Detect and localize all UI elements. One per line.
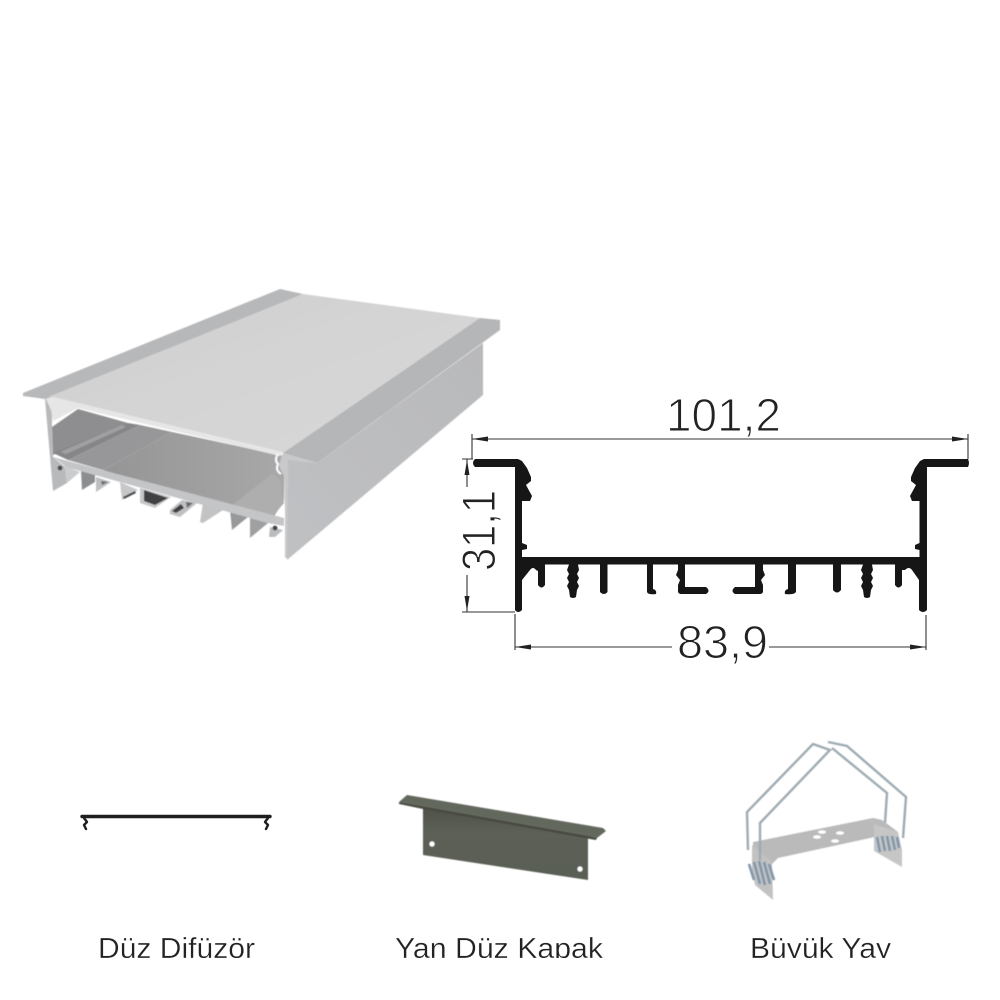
spring plate xyxy=(753,818,898,866)
accessory: flat diffuser xyxy=(82,816,270,829)
section profile xyxy=(473,459,969,612)
back wire xyxy=(832,748,887,823)
left leg xyxy=(752,845,773,900)
left flange xyxy=(23,289,303,399)
dimension 83,9 xyxy=(515,614,926,668)
dimension 101,2: 101,2 xyxy=(666,389,781,441)
accessory: end cap xyxy=(399,795,606,880)
dimension 101,2 xyxy=(472,389,968,459)
cross-section technical drawing xyxy=(452,389,969,668)
accessory: large spring xyxy=(747,742,906,900)
right side wall xyxy=(287,343,483,560)
right leg xyxy=(874,824,902,867)
back wall interior xyxy=(52,409,128,455)
label: Yan Düz Kapak: Yan Düz Kapak xyxy=(395,933,604,965)
dimension 31,1: 31,1 xyxy=(452,490,505,571)
left wall front face xyxy=(45,399,67,491)
clip band below labels xyxy=(0,958,1000,1000)
interior floor bands xyxy=(53,423,140,460)
right flange xyxy=(283,318,500,463)
base front strip xyxy=(53,457,284,526)
diffuser cover xyxy=(48,294,480,453)
label: Düz Difüzör: Düz Difüzör xyxy=(98,933,255,965)
front fins xyxy=(58,466,283,538)
dimension 31,1 xyxy=(452,459,515,612)
right end face xyxy=(279,453,317,558)
coil springs xyxy=(749,836,899,885)
3D aluminium profile illustration xyxy=(23,289,500,560)
front wires xyxy=(747,744,830,860)
label: Büyük Yay: Büyük Yay xyxy=(750,933,892,965)
dimension 83,9: 83,9 xyxy=(677,616,768,668)
